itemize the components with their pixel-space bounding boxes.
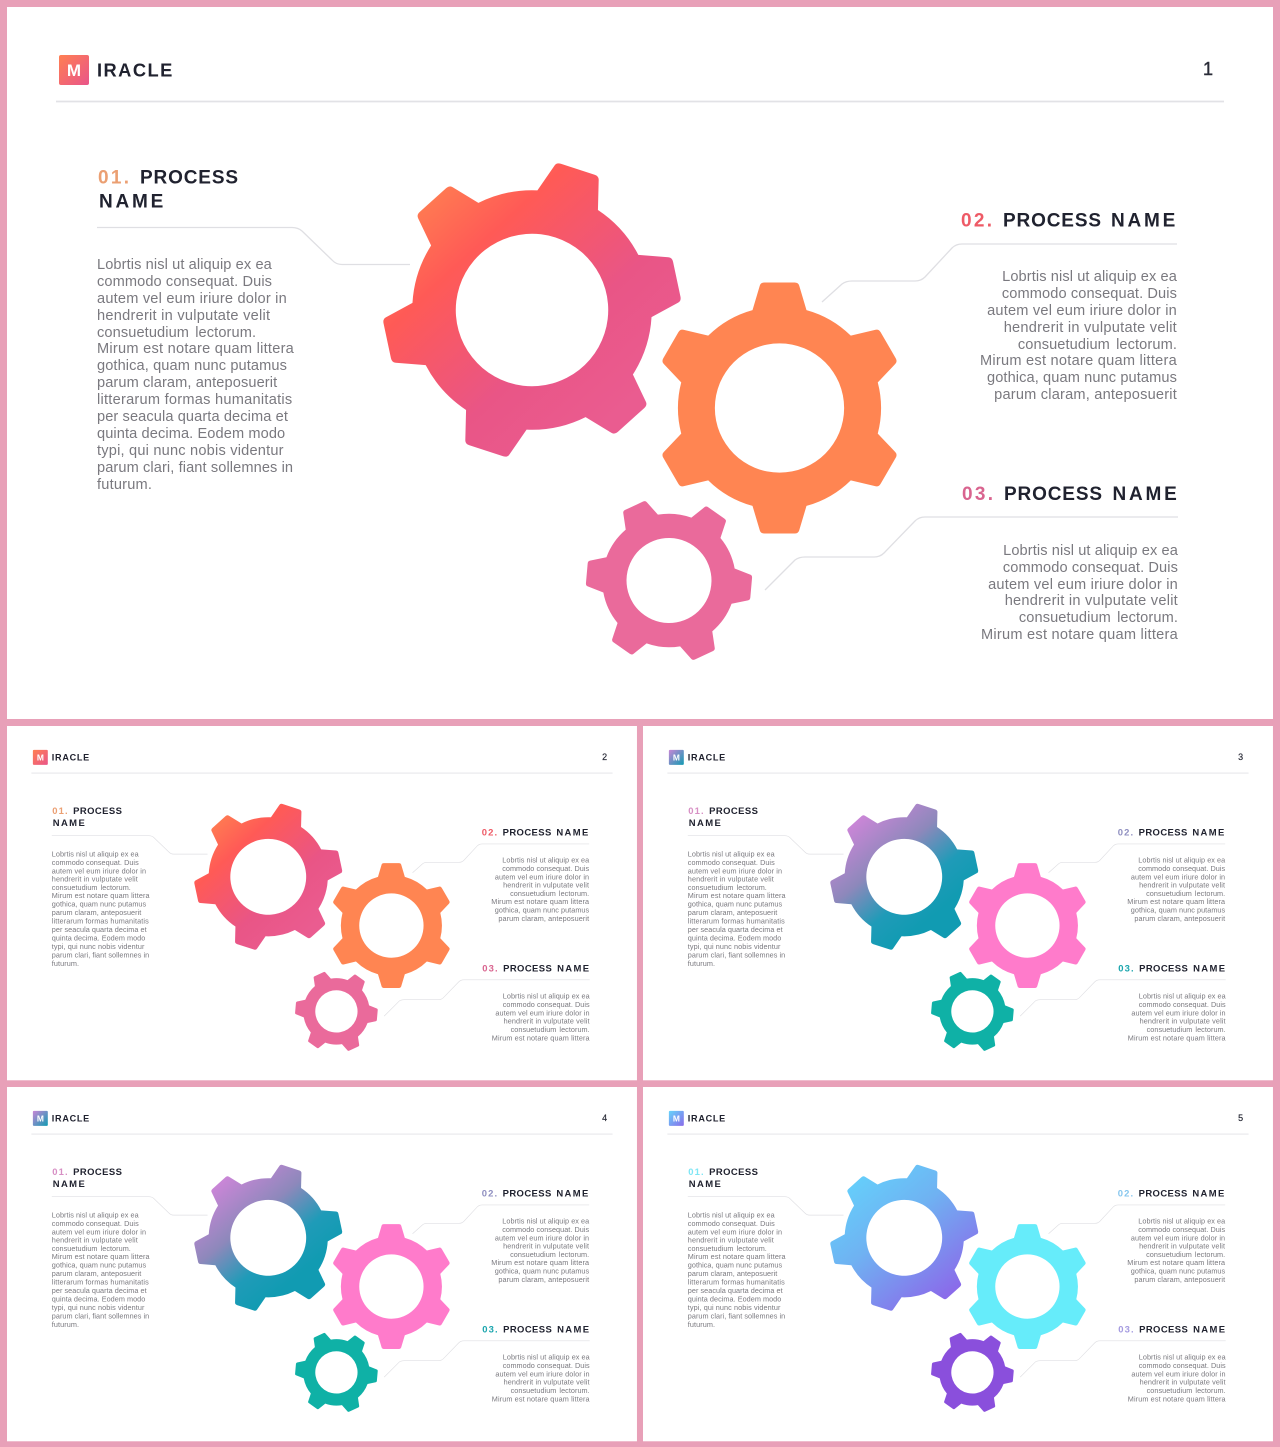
connector: process 02 [413, 1205, 589, 1234]
heading: process 02: PROCESS [1139, 1188, 1188, 1199]
connector: process 03 [1020, 980, 1226, 1016]
body text: process 01: Lobrtis nisl ut aliquip ex ea [52, 849, 140, 858]
body text: process 01: futurum. [52, 959, 79, 968]
body text: process 03: Mirum est notare quam littera [492, 1033, 591, 1042]
body text: process 01: gothica, quam nunc putamus [688, 900, 783, 909]
body text: process 01: hendrerit in vulputate velit [97, 308, 270, 324]
body text: process 01: parum clari, fiant sollemnes in [97, 460, 293, 476]
body text: process 02: Mirum est notare quam littera [491, 1258, 590, 1267]
page number: 4 [602, 1113, 607, 1123]
body text: process 01: per seacula quarta decima et [97, 409, 288, 425]
body text: process 01: parum clari, fiant sollemnes in [688, 950, 785, 959]
heading: process 02: PROCESS [1139, 827, 1188, 838]
connector: process 02 [413, 844, 589, 873]
body text: process 02: commodo consequat. Duis [502, 864, 590, 873]
body text: process 01: Mirum est notare quam littera [97, 341, 295, 357]
body text: process 02: Mirum est notare quam littera [491, 897, 590, 906]
connector: process 03 [384, 980, 590, 1016]
heading: process 03: PROCESS [1139, 1324, 1188, 1335]
body text: process 03: Lobrtis nisl ut aliquip ex ea [503, 1353, 591, 1362]
body text: process 01: quinta decima. Eodem modo [688, 1294, 781, 1303]
body text: process 02: parum claram, anteposuerit [498, 1275, 589, 1284]
connector: process 01 [52, 836, 208, 854]
heading: process 03: 03. [1118, 963, 1135, 974]
heading: process 02: 02. [961, 211, 994, 232]
heading: process 01: NAME [689, 818, 722, 829]
body text: process 01: consuetudium lectorum. [688, 883, 767, 892]
gear: large [355, 127, 709, 493]
panel: slide 1 [7, 7, 1273, 719]
gear: medium [333, 863, 450, 988]
heading: process 03: PROCESS [503, 963, 552, 974]
body text: process 01: parum claram, anteposuerit [688, 908, 777, 917]
body text: process 03: hendrerit in vulputate velit [504, 1378, 590, 1387]
body text: process 01: hendrerit in vulputate velit [52, 875, 138, 884]
body text: process 03: consuetudium lectorum. [1147, 1025, 1226, 1034]
body text: process 01: typi, qui nunc nobis videntur [688, 942, 781, 951]
body text: process 02: autem vel eum iriure dolor in [495, 1233, 589, 1242]
heading: process 03: 03. [1118, 1324, 1135, 1335]
gear: small [281, 1317, 391, 1428]
logo: IRACLE [97, 60, 174, 80]
heading: process 01: 01. [52, 806, 69, 817]
heading: process 02: NAME [1111, 211, 1178, 232]
body text: process 02: parum claram, anteposuerit [994, 387, 1177, 403]
page number: 3 [1238, 752, 1243, 762]
body text: process 02: parum claram, anteposuerit [1134, 914, 1225, 923]
logo: IRACLE [52, 1114, 90, 1124]
body text: process 01: per seacula quarta decima et [52, 1286, 147, 1295]
body text: process 03: autem vel eum iriure dolor in [1131, 1370, 1226, 1379]
body text: process 01: commodo consequat. Duis [52, 858, 139, 867]
body text: process 01: Lobrtis nisl ut aliquip ex ea [52, 1210, 140, 1219]
connector: process 01 [688, 1197, 844, 1215]
connector: process 02 [822, 244, 1177, 302]
heading: process 01: PROCESS [73, 1167, 122, 1178]
heading: process 02: 02. [1118, 827, 1134, 838]
logo: M [673, 752, 680, 762]
body text: process 01: typi, qui nunc nobis videntur [52, 942, 145, 951]
heading: process 03: NAME [1193, 963, 1226, 974]
body text: process 03: Lobrtis nisl ut aliquip ex ea [1139, 1353, 1227, 1362]
body text: process 01: Lobrtis nisl ut aliquip ex ea [688, 849, 776, 858]
body text: process 03: autem vel eum iriure dolor in [495, 1009, 590, 1018]
body text: process 02: gothica, quam nunc putamus [495, 1267, 590, 1276]
body text: process 01: autem vel eum iriure dolor in [97, 291, 287, 307]
body text: process 03: consuetudium lectorum. [511, 1025, 590, 1034]
gear: medium [662, 282, 897, 534]
body text: process 01: Mirum est notare quam littera [688, 1252, 787, 1261]
body text: process 02: autem vel eum iriure dolor in [1131, 872, 1225, 881]
heading: process 02: PROCESS [503, 827, 552, 838]
body text: process 02: consuetudium lectorum. [1146, 889, 1225, 898]
body text: process 02: commodo consequat. Duis [1138, 864, 1226, 873]
body text: process 02: hendrerit in vulputate velit [503, 881, 589, 890]
body text: process 03: Mirum est notare quam littera [1128, 1033, 1227, 1042]
connector: process 03 [765, 517, 1178, 590]
body text: process 03: commodo consequat. Duis [503, 1361, 590, 1370]
gear: large [816, 1147, 992, 1329]
logo [33, 750, 90, 765]
heading: process 01: PROCESS [73, 806, 122, 817]
logo [669, 750, 726, 765]
logo [59, 55, 174, 85]
page number: 1 [1203, 59, 1213, 79]
body text: process 01: parum clari, fiant sollemnes in [52, 950, 149, 959]
body text: process 01: hendrerit in vulputate velit [52, 1236, 138, 1245]
heading: process 01: 01. [688, 1167, 705, 1178]
body text: process 01: parum claram, anteposuerit [52, 1269, 141, 1278]
body text: process 01: per seacula quarta decima et [52, 925, 147, 934]
body text: process 02: Mirum est notare quam littera [1127, 897, 1226, 906]
body text: process 01: per seacula quarta decima et [688, 925, 783, 934]
heading: process 01: NAME [53, 818, 86, 829]
gear: small [918, 1317, 1027, 1428]
body text: process 01: gothica, quam nunc putamus [688, 1261, 783, 1270]
logo: M [37, 752, 44, 762]
body text: process 03: commodo consequat. Duis [1003, 560, 1178, 576]
body text: process 02: consuetudium lectorum. [1018, 337, 1177, 353]
body text: process 03: Mirum est notare quam littera [492, 1394, 591, 1403]
body text: process 01: futurum. [97, 477, 152, 493]
logo: M [37, 1113, 44, 1123]
body text: process 03: commodo consequat. Duis [503, 1000, 590, 1009]
heading: process 03: 03. [482, 1324, 499, 1335]
body text: process 01: litterarum formas humanitatis [688, 1278, 785, 1287]
body text: process 01: Mirum est notare quam littera [52, 891, 151, 900]
heading: process 02: NAME [1192, 827, 1226, 838]
gear: large [180, 1147, 356, 1329]
body text: process 01: quinta decima. Eodem modo [52, 933, 145, 942]
heading: process 03: NAME [557, 963, 590, 974]
body text: process 01: gothica, quam nunc putamus [97, 358, 287, 374]
logo: IRACLE [688, 753, 726, 763]
body text: process 02: Mirum est notare quam littera [1127, 1258, 1226, 1267]
body text: process 01: autem vel eum iriure dolor in [688, 1227, 782, 1236]
body text: process 01: futurum. [688, 959, 715, 968]
logo [669, 1111, 726, 1126]
heading: process 02: NAME [1192, 1188, 1226, 1199]
body text: process 02: gothica, quam nunc putamus [495, 906, 590, 915]
logo: M [673, 1113, 680, 1123]
panel: slide 2 [7, 726, 637, 1080]
body text: process 03: commodo consequat. Duis [1139, 1361, 1226, 1370]
body text: process 01: Mirum est notare quam littera [52, 1252, 151, 1261]
heading: process 01: NAME [53, 1179, 86, 1190]
gear: medium [333, 1224, 450, 1349]
heading: process 03: PROCESS [1139, 963, 1188, 974]
body text: process 01: parum clari, fiant sollemnes in [688, 1311, 785, 1320]
heading: process 01: NAME [99, 192, 166, 212]
body text: process 01: hendrerit in vulputate velit [688, 1236, 774, 1245]
body text: process 02: hendrerit in vulputate velit [1139, 881, 1225, 890]
body text: process 03: hendrerit in vulputate velit [1005, 593, 1178, 609]
logo: IRACLE [688, 1114, 726, 1124]
body text: process 01: gothica, quam nunc putamus [52, 900, 147, 909]
heading: process 02: PROCESS [503, 1188, 552, 1199]
body text: process 02: gothica, quam nunc putamus [1131, 906, 1226, 915]
body text: process 02: Lobrtis nisl ut aliquip ex ea [1138, 1216, 1226, 1225]
heading: process 01: NAME [689, 1179, 722, 1190]
body text: process 02: commodo consequat. Duis [1138, 1225, 1226, 1234]
gear: large [816, 786, 992, 968]
body text: process 02: consuetudium lectorum. [510, 889, 589, 898]
connector: process 01 [688, 836, 844, 854]
heading: process 02: PROCESS [1003, 211, 1102, 232]
heading: process 03: PROCESS [503, 1324, 552, 1335]
body text: process 01: hendrerit in vulputate velit [688, 875, 774, 884]
body text: process 02: parum claram, anteposuerit [498, 914, 589, 923]
body text: process 01: litterarum formas humanitatis [52, 1278, 149, 1287]
body text: process 01: typi, qui nunc nobis videntur [97, 443, 284, 459]
body text: process 01: autem vel eum iriure dolor in [52, 1227, 146, 1236]
body text: process 01: quinta decima. Eodem modo [52, 1294, 145, 1303]
heading: process 01: 01. [688, 806, 705, 817]
body text: process 02: parum claram, anteposuerit [1134, 1275, 1225, 1284]
heading: process 03: NAME [1193, 1324, 1226, 1335]
body text: process 02: autem vel eum iriure dolor in [1131, 1233, 1225, 1242]
body text: process 01: commodo consequat. Duis [97, 274, 272, 290]
body text: process 01: consuetudium lectorum. [97, 325, 256, 341]
body text: process 01: futurum. [52, 1320, 79, 1329]
body text: process 02: Lobrtis nisl ut aliquip ex ea [502, 855, 590, 864]
body text: process 01: futurum. [688, 1320, 715, 1329]
body text: process 03: consuetudium lectorum. [511, 1386, 590, 1395]
heading: process 01: 01. [52, 1167, 69, 1178]
connector: process 02 [1049, 844, 1225, 873]
heading: process 03: NAME [1112, 484, 1180, 505]
body text: process 01: consuetudium lectorum. [52, 1244, 131, 1253]
gear: small [918, 956, 1027, 1067]
body text: process 02: hendrerit in vulputate velit [1139, 1242, 1225, 1251]
connector: process 02 [1049, 1205, 1225, 1234]
connector: process 01 [52, 1197, 208, 1215]
body text: process 03: Lobrtis nisl ut aliquip ex ea [1139, 992, 1227, 1001]
body text: process 02: Lobrtis nisl ut aliquip ex ea [1138, 855, 1226, 864]
heading: process 03: PROCESS [1004, 484, 1103, 505]
body text: process 01: gothica, quam nunc putamus [52, 1261, 147, 1270]
body text: process 01: parum claram, anteposuerit [688, 1269, 777, 1278]
body text: process 01: autem vel eum iriure dolor in [688, 866, 782, 875]
body text: process 02: Lobrtis nisl ut aliquip ex ea [502, 1216, 590, 1225]
body text: process 01: quinta decima. Eodem modo [97, 426, 285, 442]
heading: process 01: PROCESS [140, 168, 239, 188]
logo: M [67, 61, 81, 80]
body text: process 03: hendrerit in vulputate velit [504, 1017, 590, 1026]
page number: 2 [602, 752, 607, 762]
body text: process 03: consuetudium lectorum. [1019, 610, 1178, 626]
body text: process 02: consuetudium lectorum. [510, 1250, 589, 1259]
body text: process 02: Mirum est notare quam littera [980, 353, 1178, 369]
body text: process 02: consuetudium lectorum. [1146, 1250, 1225, 1259]
body text: process 02: autem vel eum iriure dolor in [987, 303, 1177, 319]
panel: slide 3 [643, 726, 1273, 1080]
body text: process 02: commodo consequat. Duis [1002, 286, 1177, 302]
body text: process 01: parum claram, anteposuerit [52, 908, 141, 917]
heading: process 02: NAME [556, 1188, 590, 1199]
body text: process 03: autem vel eum iriure dolor in [495, 1370, 590, 1379]
heading: process 02: 02. [1118, 1188, 1134, 1199]
body text: process 01: typi, qui nunc nobis videntur [688, 1303, 781, 1312]
body text: process 01: parum clari, fiant sollemnes in [52, 1311, 149, 1320]
body text: process 02: hendrerit in vulputate velit [503, 1242, 589, 1251]
heading: process 01: PROCESS [709, 1167, 758, 1178]
body text: process 02: autem vel eum iriure dolor in [495, 872, 589, 881]
body text: process 01: parum claram, anteposuerit [97, 375, 277, 391]
heading: process 02: NAME [556, 827, 590, 838]
body text: process 03: Mirum est notare quam littera [981, 627, 1179, 643]
body text: process 02: commodo consequat. Duis [502, 1225, 590, 1234]
gear: small [281, 956, 391, 1067]
logo: IRACLE [52, 753, 90, 763]
body text: process 03: Lobrtis nisl ut aliquip ex ea [1003, 543, 1179, 559]
panel: slide 5 [643, 1087, 1273, 1441]
body text: process 01: Lobrtis nisl ut aliquip ex ea [97, 257, 273, 273]
gear: medium [969, 1224, 1086, 1349]
page number: 5 [1238, 1113, 1243, 1123]
panel: slide 4 [7, 1087, 637, 1441]
body text: process 01: quinta decima. Eodem modo [688, 933, 781, 942]
body text: process 03: consuetudium lectorum. [1147, 1386, 1226, 1395]
body text: process 01: commodo consequat. Duis [52, 1219, 139, 1228]
body text: process 03: autem vel eum iriure dolor in [988, 577, 1178, 593]
gear: medium [969, 863, 1086, 988]
heading: process 01: 01. [98, 168, 131, 188]
body text: process 01: consuetudium lectorum. [52, 883, 131, 892]
body text: process 03: Lobrtis nisl ut aliquip ex ea [503, 992, 591, 1001]
heading: process 03: 03. [962, 484, 995, 505]
body text: process 02: gothica, quam nunc putamus [1131, 1267, 1226, 1276]
logo [33, 1111, 90, 1126]
body text: process 01: commodo consequat. Duis [688, 1219, 775, 1228]
body text: process 01: typi, qui nunc nobis videntur [52, 1303, 145, 1312]
body text: process 01: Lobrtis nisl ut aliquip ex ea [688, 1210, 776, 1219]
body text: process 03: Mirum est notare quam littera [1128, 1394, 1227, 1403]
body text: process 02: gothica, quam nunc putamus [987, 370, 1177, 386]
body text: process 02: Lobrtis nisl ut aliquip ex ea [1002, 269, 1178, 285]
gear: large [180, 786, 356, 968]
body text: process 01: litterarum formas humanitatis [52, 917, 149, 926]
body text: process 01: autem vel eum iriure dolor in [52, 866, 146, 875]
body text: process 02: hendrerit in vulputate velit [1004, 320, 1177, 336]
body text: process 03: hendrerit in vulputate velit [1140, 1378, 1226, 1387]
body text: process 01: litterarum formas humanitatis [688, 917, 785, 926]
body text: process 01: litterarum formas humanitatis [97, 392, 292, 408]
body text: process 03: commodo consequat. Duis [1139, 1000, 1226, 1009]
heading: process 03: 03. [482, 963, 499, 974]
body text: process 01: consuetudium lectorum. [688, 1244, 767, 1253]
connector: process 01 [97, 228, 410, 264]
body text: process 01: Mirum est notare quam littera [688, 891, 787, 900]
body text: process 01: commodo consequat. Duis [688, 858, 775, 867]
body text: process 03: autem vel eum iriure dolor in [1131, 1009, 1226, 1018]
gear: small [559, 469, 779, 692]
heading: process 03: NAME [557, 1324, 590, 1335]
body text: process 03: hendrerit in vulputate velit [1140, 1017, 1226, 1026]
connector: process 03 [384, 1341, 590, 1377]
connector: process 03 [1020, 1341, 1226, 1377]
body text: process 01: per seacula quarta decima et [688, 1286, 783, 1295]
heading: process 02: 02. [482, 827, 498, 838]
heading: process 01: PROCESS [709, 806, 758, 817]
heading: process 02: 02. [482, 1188, 498, 1199]
